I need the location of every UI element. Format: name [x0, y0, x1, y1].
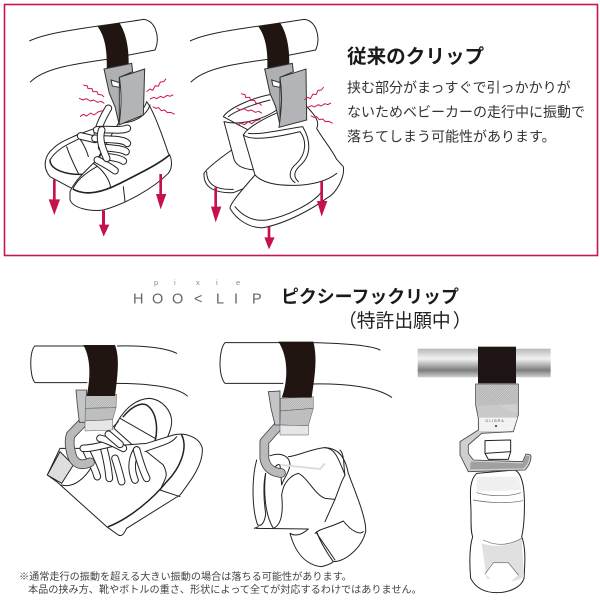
- handle bar: [220, 343, 392, 397]
- heading: pixie hooklip: ピクシーフックリップ: [281, 287, 459, 307]
- hooklip: [264, 391, 313, 473]
- logo: pixie hooklip: HOO<LIP: [133, 292, 262, 308]
- clip: [265, 63, 293, 125]
- handle bar: [29, 19, 157, 82]
- back boot: [204, 150, 257, 193]
- arrows: falling boots: [211, 182, 327, 249]
- footnote: 本品の挟み方、靴やボトルの重さ、形状によって全てが対応するわけではありません。: [28, 583, 422, 596]
- footnote: [19, 570, 422, 596]
- vibration lines: [79, 79, 175, 117]
- strap: [98, 23, 129, 71]
- illustration: boots on conventional clip: [190, 19, 344, 228]
- vibration lines: [237, 87, 333, 125]
- heading: patent pending: （特許出願中）: [338, 310, 471, 331]
- illustration: bottle on hooklip: [418, 347, 551, 593]
- footnote: ※通常走行の振動を超える大きい振動の場合は落ちる可能性があります。: [19, 570, 352, 583]
- logo: pixie hooklip: [133, 278, 262, 308]
- ghost hook: [282, 463, 325, 469]
- back sneaker: [114, 398, 172, 452]
- strap: [478, 347, 516, 383]
- logo: pixie hooklip: pixie: [154, 278, 240, 287]
- text block: conventional clip explanation: ないためベビーカーの走行中に振動で: [347, 104, 585, 120]
- front sneaker: [47, 434, 202, 536]
- laces: [81, 108, 127, 171]
- heading: conventional clip: 従来のクリップ: [347, 46, 485, 68]
- illustration: sneakers on conventional clip: [29, 19, 175, 210]
- text block: conventional clip explanation: 落ちてしまう可能性があります。: [347, 128, 556, 144]
- bottle: [470, 470, 525, 593]
- hooklip: GLIBRA: [485, 419, 505, 423]
- back sneaker: [45, 128, 110, 188]
- front sneaker: [70, 102, 171, 210]
- strap: [278, 342, 315, 398]
- text block: conventional clip explanation: 挟む部分がまっすぐで引っかかりが: [347, 80, 571, 96]
- laces: [83, 434, 147, 482]
- front boot: [230, 107, 344, 228]
- illustration: boots on hooklip: [220, 342, 392, 567]
- hooklip: [70, 390, 117, 464]
- handle bar: [31, 346, 187, 396]
- bottle cap: [485, 440, 511, 459]
- handle bar: [190, 19, 318, 82]
- strap: [83, 345, 118, 396]
- strap: [258, 23, 289, 71]
- handle bar: [418, 349, 551, 377]
- arrows: falling sneakers: [49, 174, 166, 237]
- text block: conventional clip explanation: [347, 80, 585, 144]
- illustration: sneakers on hooklip: [31, 345, 202, 536]
- boots: [253, 448, 366, 567]
- clip: [104, 63, 145, 125]
- panel: conventional clip: [4, 4, 598, 256]
